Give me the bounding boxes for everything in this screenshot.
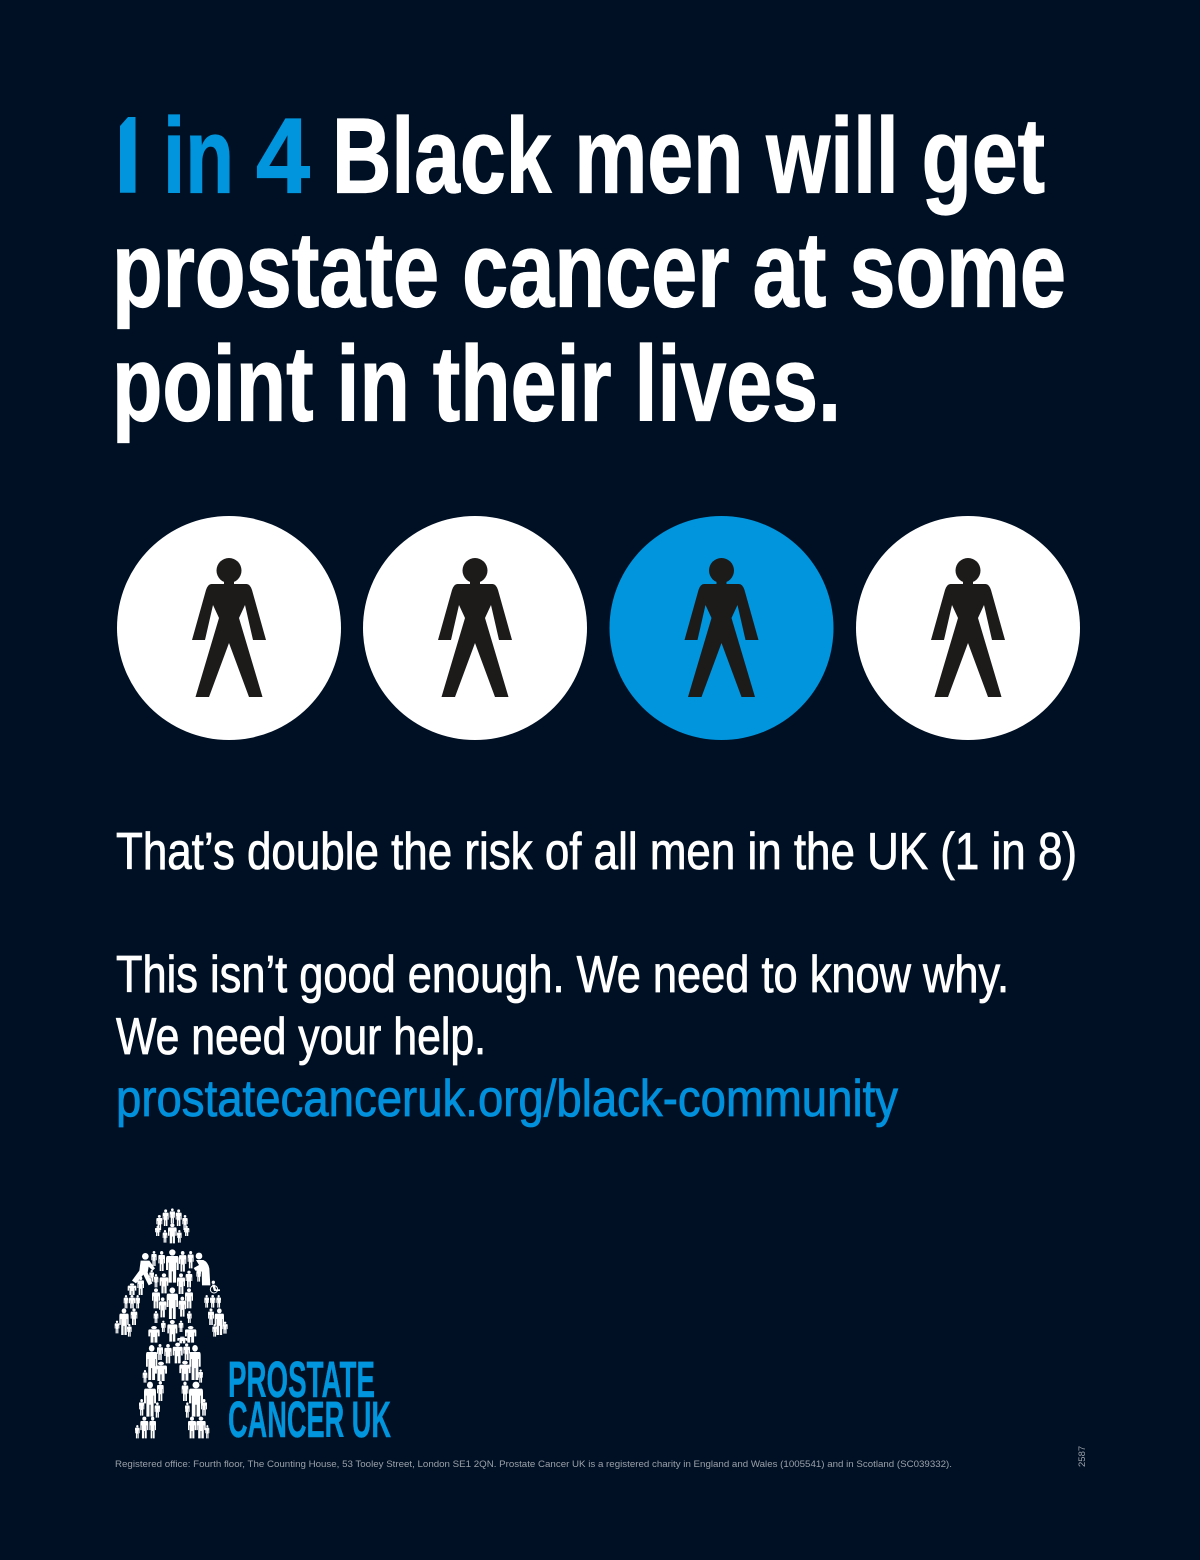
text: call to action: [116, 946, 1009, 1066]
text: call to action: We need your help.: [116, 1008, 486, 1066]
pictogram: 1 in 4 men: [117, 516, 1080, 740]
highlighted numeral one: [119, 96, 136, 216]
icon: white circle with man 2: [363, 516, 587, 740]
title: in: [163, 96, 234, 216]
title: 4: [256, 96, 310, 216]
logo: wordmark: PROSTATE: [228, 1351, 375, 1408]
title: point in their lives.: [112, 324, 841, 444]
text: reference number: 2587: [1077, 1446, 1088, 1467]
text: registered office footer: Registered office: Fourth floor, The Counting House, 53 Tooley Street, London SE1 2QN. Prostate Cancer UK is a registered charity in England and Wales (1005541) and in Scotland (SC039332).: [115, 1459, 952, 1470]
icon: blue highlighted circle with man 3: [610, 516, 834, 740]
logo: wordmark: [228, 1351, 391, 1448]
title: 1: [119, 96, 136, 216]
text: call to action: This isn’t good enough. We need to know why.: [116, 946, 1009, 1004]
logo: figure made of people: [115, 1208, 228, 1438]
icon: white circle with man 4: [856, 516, 1080, 740]
icon: white circle with man 1: [117, 516, 341, 740]
text: website link: prostatecanceruk.org/black-community: [116, 1070, 898, 1128]
title: [112, 96, 1066, 444]
logo: wordmark: CANCER UK: [228, 1391, 391, 1448]
